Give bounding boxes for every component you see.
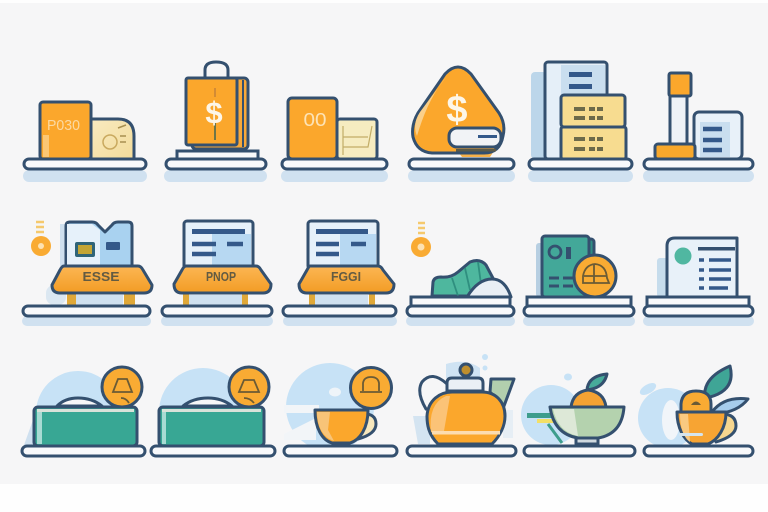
icon: teal box with coin, first [22, 367, 145, 456]
icon: key tag and teal shoe on stepped shelf [406, 223, 515, 326]
icon: orange card and cream wallet on shelf [23, 102, 147, 182]
icon: document on orange table [161, 221, 273, 326]
icon: document on orange table: PNOP [206, 269, 236, 284]
icon: dollar shopping bag on stepped shelf: $ [205, 95, 223, 130]
icon: document with two stacked boxes on shelf [528, 62, 633, 182]
icon: teal card with coin on stepped shelf [523, 236, 635, 326]
icon: cup with coin and leaves [638, 366, 753, 456]
icon: orange card with 00 on shelf [281, 98, 388, 182]
icon: orange card with 00 on shelf: 00 [304, 110, 326, 130]
icon: orange card and cream wallet on shelf: P030 [47, 117, 80, 134]
icon: ticket on orange table with key tag: ESSE [82, 269, 120, 284]
icon: teal box with coin, second [151, 367, 275, 456]
icon: orange cup with coin [284, 363, 397, 456]
icon: triangular dollar bag with disk on shelf [408, 67, 515, 182]
icon: bowl with orange [521, 374, 635, 456]
icon: document on orange table, third [283, 221, 397, 326]
icon: profile document on stepped shelf [643, 238, 754, 326]
icon: document on orange table, third: FGGI [331, 269, 361, 284]
icon: ticket on orange table with key tag [22, 222, 152, 326]
icon: tower stand with document on shelf [643, 73, 754, 182]
icon: triangular dollar bag with disk on shelf: $ [446, 89, 468, 131]
icon: orange teapot [407, 354, 516, 456]
icon: dollar shopping bag on stepped shelf [164, 62, 267, 182]
